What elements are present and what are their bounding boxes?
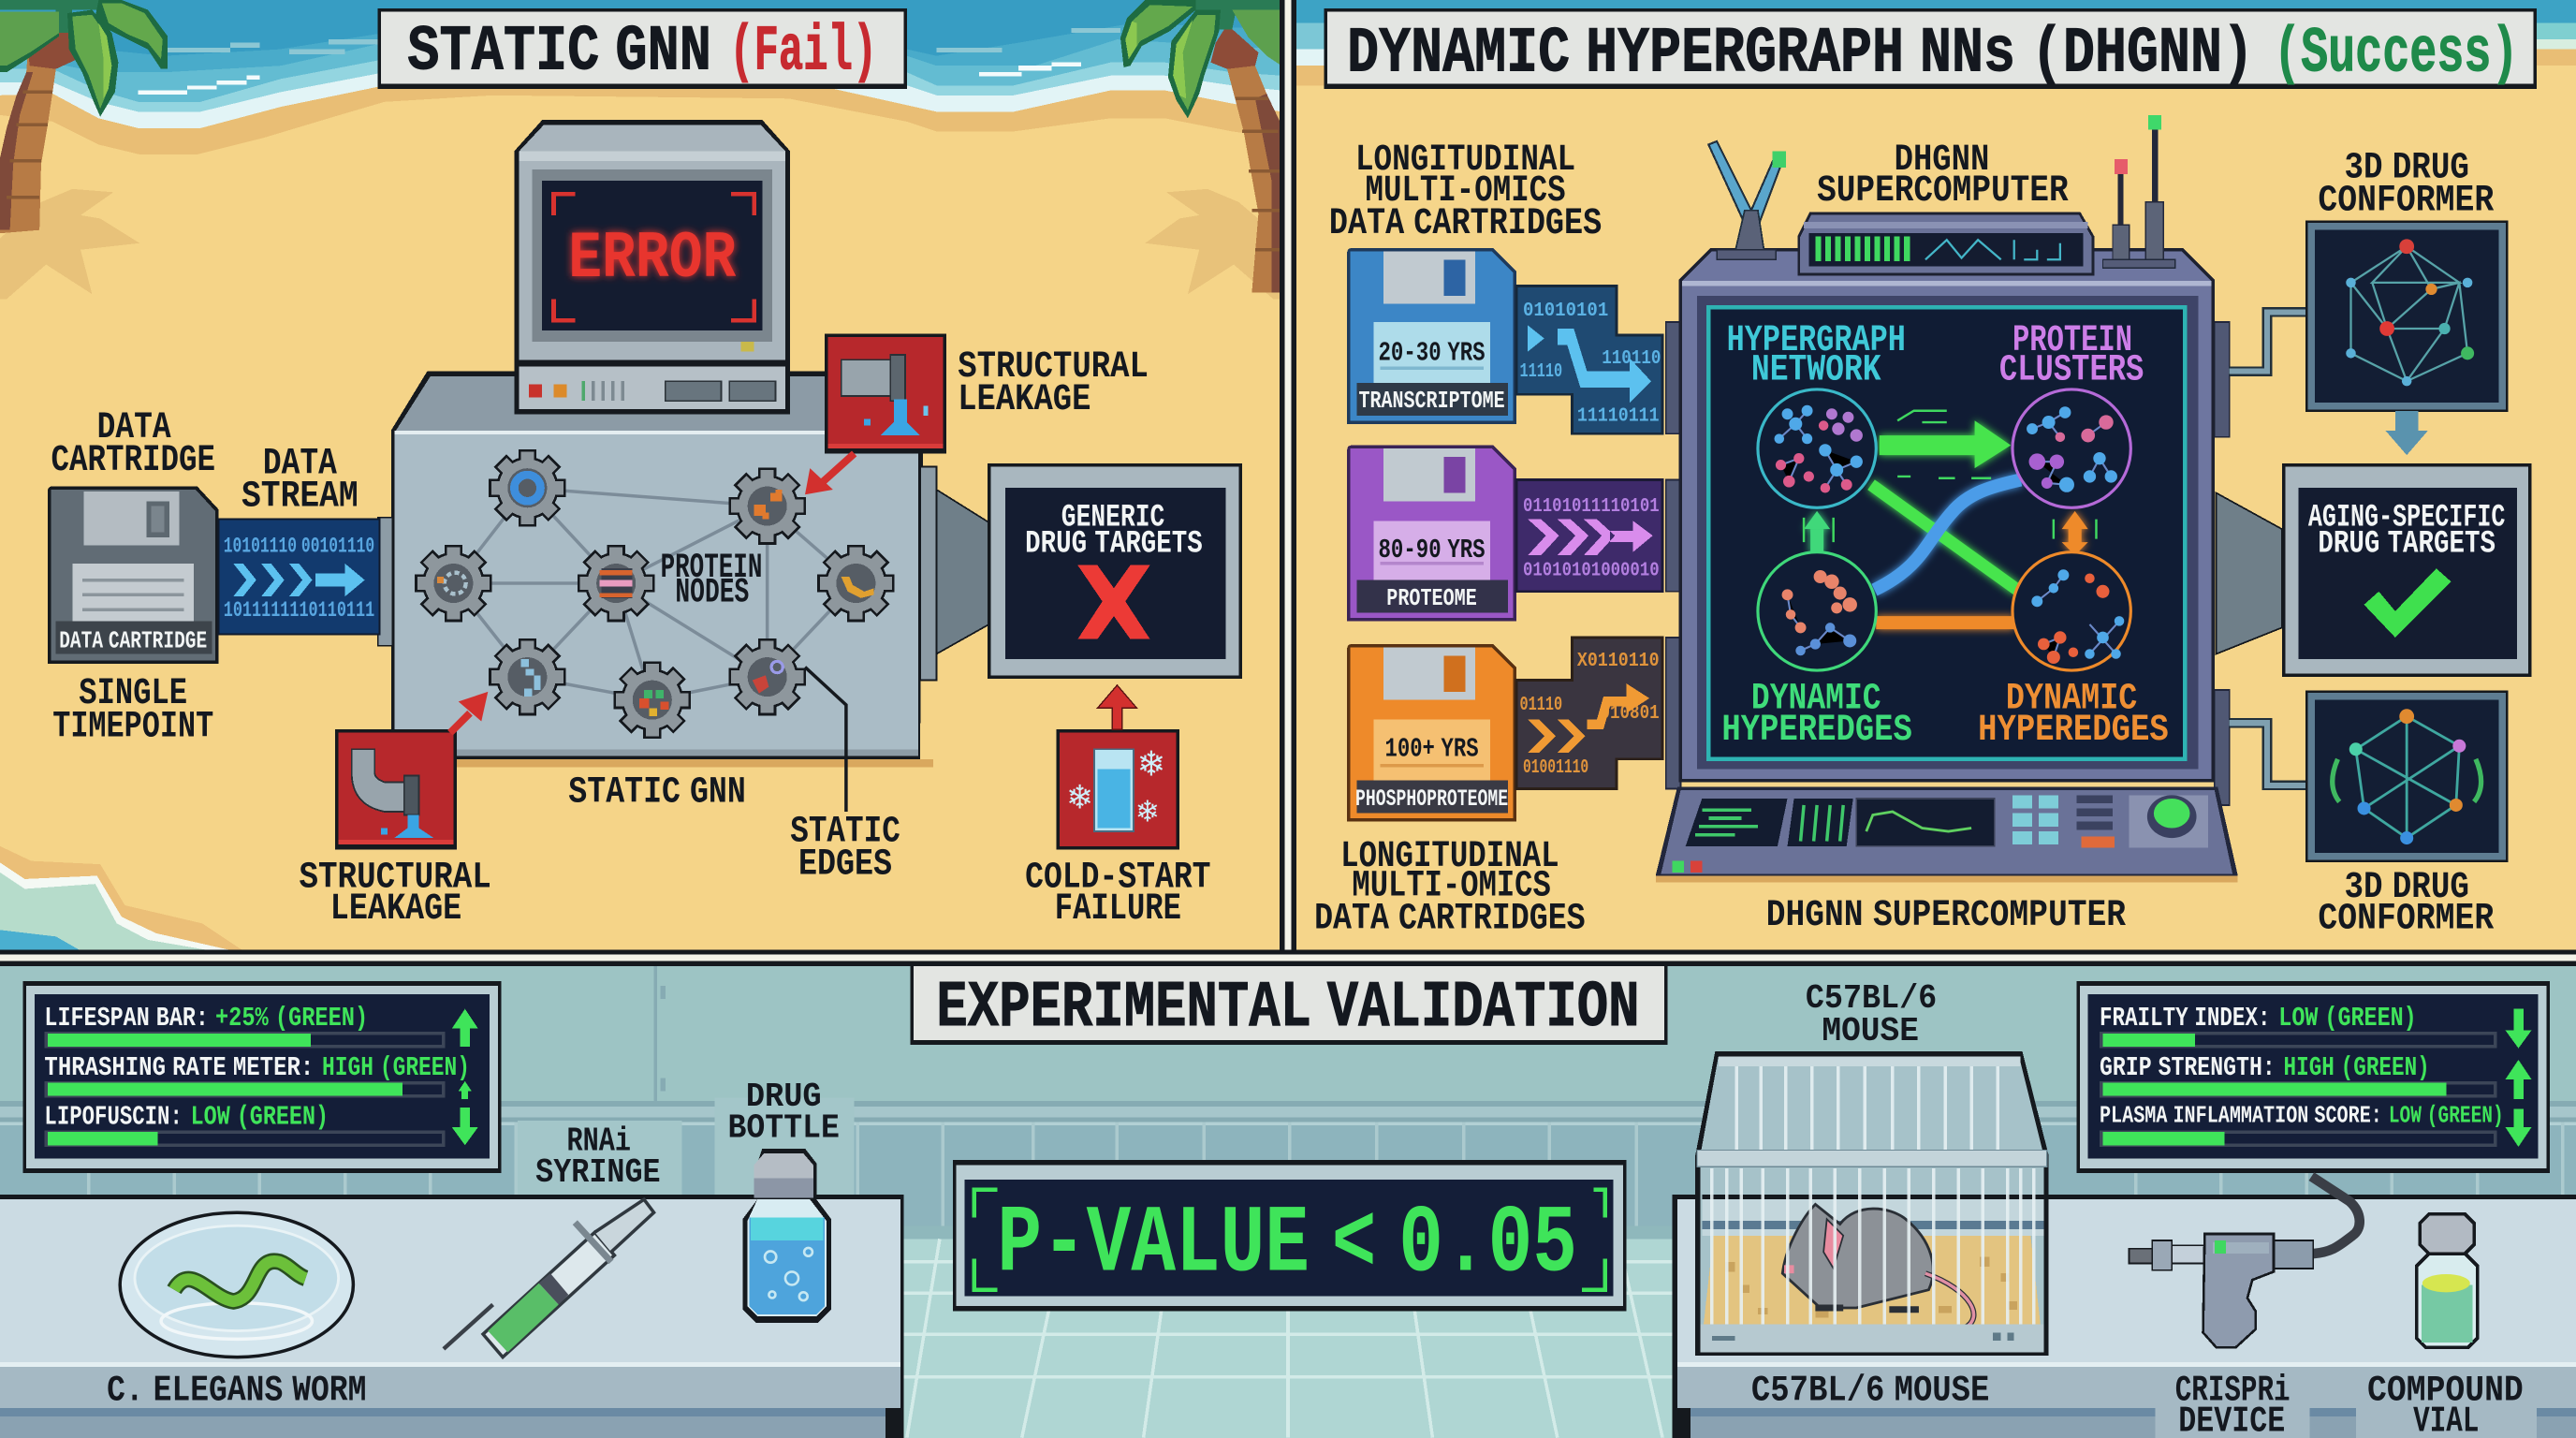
screen titles: HYPERGRAPH	[1727, 319, 1906, 361]
right panel labels: DATA CARTRIDGES	[1314, 898, 1586, 940]
palm shadows	[0, 189, 1281, 299]
cartridge blue	[1347, 248, 1516, 424]
p-value display	[953, 1160, 1627, 1312]
icon: structural leakage bottom	[335, 729, 457, 849]
right panel labels: MULTI-OMICS	[1352, 864, 1551, 906]
bottom labels: COMPOUND	[2367, 1370, 2524, 1411]
funnel right	[920, 466, 989, 681]
syringe	[444, 1199, 654, 1357]
top status bar	[1799, 213, 2093, 274]
left panel labels: STRUCTURAL	[299, 857, 491, 899]
left panel labels: LEAKAGE	[958, 378, 1090, 420]
mouse cage	[1695, 1051, 2049, 1356]
palm right	[1120, 0, 1281, 292]
red X	[1077, 565, 1150, 639]
arrow cold start up	[1097, 685, 1137, 729]
right monitor: LOW (GREEN)	[2389, 1102, 2504, 1130]
cluster dynamic orange	[2012, 552, 2130, 670]
left panel labels: SINGLE	[79, 672, 187, 714]
left panel labels: STATIC	[790, 811, 900, 853]
right monitor	[2076, 981, 2550, 1173]
cluster protein	[2012, 389, 2130, 507]
arrow leak to lower gear	[450, 713, 470, 733]
left panel labels: COLD-START	[1025, 857, 1211, 899]
cartridge blue: 20-30 YRS	[1379, 337, 1486, 368]
right monitor: FRAILTY INDEX:	[2100, 1003, 2271, 1034]
petri dish worm	[120, 1212, 353, 1357]
generic drug targets screen: DRUG TARGETS	[1025, 527, 1203, 563]
cartridge purple: 80-90 YRS	[1379, 535, 1486, 565]
right monitor: LOW (GREEN)	[2278, 1003, 2417, 1034]
floppy label: DATA CARTRIDGE	[59, 627, 207, 654]
left panel labels: STREAM	[242, 476, 359, 518]
bottom labels	[107, 979, 2524, 1438]
screen titles: HYPEREDGES	[1978, 709, 2169, 751]
stream purple	[1516, 479, 1662, 592]
side pipes	[1666, 322, 2230, 805]
right panel labels: CONFORMER	[2318, 898, 2494, 940]
icon: cold start	[1057, 729, 1179, 849]
right panel labels: DHGNN	[1895, 139, 1989, 181]
left panel labels: CARTRIDGE	[51, 439, 215, 481]
stream blue: 11110111	[1577, 404, 1660, 427]
screen titles: CLUSTERS	[1999, 348, 2144, 390]
icon: cold start: ❄	[1066, 778, 1093, 816]
arrow conformer down	[2385, 411, 2428, 455]
arrow leak to gear	[822, 453, 855, 483]
pipes right side	[2230, 312, 2306, 785]
left panel labels: NODES	[675, 573, 749, 612]
sea top left	[0, 0, 1281, 154]
left panel labels: PROTEIN	[661, 549, 762, 588]
floppy: data cartridge	[48, 486, 218, 664]
stream orange: 01001110	[1523, 756, 1588, 779]
right monitor: PLASMA INFLAMMATION SCORE:	[2100, 1102, 2382, 1130]
stream purple: 01010101000010	[1523, 559, 1660, 581]
cluster hypergraph	[1758, 389, 1876, 507]
right panel labels: DATA CARTRIDGES	[1329, 202, 1602, 244]
CRISPRi device	[2130, 1177, 2360, 1347]
mouse	[1782, 1204, 1974, 1344]
right monitor: GRIP STRENGTH:	[2100, 1052, 2276, 1083]
arrow pointer to static edges	[805, 668, 846, 812]
cartridge orange: PHOSPHOPROTEOME	[1355, 787, 1508, 813]
floor	[887, 1225, 1692, 1438]
title: static GNN: STATIC GNN	[407, 16, 711, 89]
console	[1656, 787, 2237, 882]
sea bottom-left corner	[0, 846, 242, 949]
left monitor: THRASHING RATE METER:	[44, 1052, 314, 1083]
network edges	[453, 488, 856, 700]
left panel labels: TIMEPOINT	[52, 705, 213, 747]
right panel labels: LONGITUDINAL	[1355, 139, 1575, 181]
cartridge blue: TRANSCRIPTOME	[1358, 388, 1505, 415]
bottom labels: RNAi	[567, 1123, 631, 1161]
drug bottle	[742, 1149, 831, 1323]
screen titles: PROTEIN	[2012, 319, 2132, 361]
palm left	[0, 0, 168, 233]
bottom labels: C57BL/6 MOUSE	[1751, 1370, 1989, 1411]
bottom labels: SYRINGE	[535, 1153, 661, 1192]
stream blue: 01010101	[1523, 300, 1608, 322]
right panel labels: SUPERCOMPUTER	[1817, 169, 2069, 212]
left monitor: HIGH (GREEN)	[322, 1052, 470, 1083]
left panel labels: LEAKAGE	[330, 888, 461, 930]
protein node gears	[415, 449, 895, 739]
left monitor: LIPOFUSCIN:	[44, 1101, 183, 1132]
cartridge orange: 100+ YRS	[1385, 733, 1479, 764]
panel: static GNN beach	[0, 0, 1281, 949]
stream orange: X0110110	[1577, 650, 1660, 672]
title: static GNN: (Fail)	[729, 16, 877, 89]
left panel labels: STATIC GNN	[568, 770, 746, 813]
error text: ERROR	[568, 223, 737, 297]
icon: cold start: ❄	[1135, 796, 1160, 829]
screen titles: NETWORK	[1751, 348, 1881, 390]
stream purple: 01101011110101	[1523, 495, 1660, 518]
left monitor: LOW (GREEN)	[191, 1101, 329, 1132]
aging screen: AGING-SPECIFIC	[2308, 501, 2505, 536]
antennas	[1708, 115, 2175, 268]
supercomputer	[1656, 115, 2237, 882]
generic drug targets screen	[988, 463, 1242, 679]
cage bars	[1712, 1066, 2034, 1325]
right panel labels: 3D DRUG	[2344, 147, 2469, 189]
screen titles	[1721, 319, 2169, 751]
connector left	[378, 518, 393, 646]
error brackets	[554, 194, 754, 320]
left panel labels: FAILURE	[1055, 888, 1181, 930]
compound vial	[2415, 1212, 2479, 1349]
flow arrows	[1804, 411, 2096, 623]
monitor	[514, 120, 790, 414]
right panel labels: MULTI-OMICS	[1365, 169, 1566, 212]
wall panel line	[654, 966, 666, 1101]
right monitor: HIGH (GREEN)	[2284, 1052, 2430, 1083]
left panel labels: DATA	[263, 442, 337, 484]
right panel labels: 3D DRUG	[2344, 866, 2469, 908]
icon: structural leakage top	[825, 333, 946, 453]
3D conformer top	[2306, 222, 2507, 411]
aging screen	[2217, 463, 2532, 677]
panel dividers	[0, 0, 2576, 966]
bottom labels: CRISPRi	[2175, 1370, 2291, 1411]
green check	[2364, 568, 2452, 638]
right panel labels: CONFORMER	[2318, 180, 2494, 222]
left panel labels: DATA	[97, 406, 171, 448]
left monitor	[23, 981, 501, 1173]
panel: DHGNN success	[1296, 0, 2576, 949]
left panel labels	[51, 345, 1211, 930]
stream blue: 110110	[1602, 347, 1661, 370]
stream orange	[1516, 638, 1662, 788]
3D conformer bottom	[2306, 692, 2507, 861]
data stream: 1011111110110111	[224, 598, 374, 623]
bottom labels: C57BL/6	[1806, 979, 1937, 1018]
screen titles: DYNAMIC	[1751, 677, 1881, 719]
bottom labels: BOTTLE	[728, 1108, 840, 1147]
stream orange: 01110	[1519, 694, 1562, 716]
cartridge orange	[1347, 644, 1516, 822]
p-value display: P-VALUE < 0.05	[997, 1191, 1577, 1299]
tables	[0, 1195, 2576, 1438]
data stream: 10101110 00101110	[224, 535, 374, 559]
wall stripes and tiles	[0, 1101, 2576, 1225]
right panel labels: LONGITUDINAL	[1340, 835, 1559, 877]
cartridge purple	[1347, 446, 1516, 621]
title: DHGNN: DYNAMIC HYPERGRAPH NNs (DHGNN)	[1347, 17, 2254, 90]
bottom labels: C. ELEGANS WORM	[107, 1370, 366, 1411]
data stream	[218, 520, 379, 634]
main screen	[1708, 307, 2185, 759]
left panel labels: EDGES	[798, 844, 892, 886]
title: static GNN	[378, 8, 907, 89]
aging screen: DRUG TARGETS	[2318, 527, 2496, 563]
bottom labels: DRUG	[746, 1078, 822, 1116]
left panel labels: STRUCTURAL	[958, 345, 1149, 388]
lighter patch behind labels	[518, 1097, 855, 1195]
cluster dynamic green	[1758, 552, 1876, 670]
bottom labels: MOUSE	[1822, 1012, 1919, 1050]
stream blue	[1516, 286, 1662, 433]
title: experimental validation: EXPERIMENTAL VALIDATION	[936, 971, 1640, 1045]
screen titles: HYPEREDGES	[1721, 709, 1912, 751]
right panel labels: DHGNN SUPERCOMPUTER	[1766, 894, 2126, 936]
generic drug targets screen: GENERIC	[1061, 501, 1164, 536]
stream blue: 11110	[1519, 360, 1562, 383]
cartridge purple: PROTEOME	[1386, 585, 1477, 612]
icon: cold start: ❄	[1137, 743, 1165, 784]
right panel labels	[1314, 139, 2494, 940]
left monitor: +25% (GREEN)	[215, 1003, 368, 1034]
screen titles: DYNAMIC	[2006, 677, 2137, 719]
stream orange: 010801	[1600, 702, 1660, 725]
panel: experimental validation	[0, 962, 2576, 1438]
left monitor: LIFESPAN BAR:	[44, 1003, 209, 1034]
main static GNN box	[378, 372, 989, 768]
